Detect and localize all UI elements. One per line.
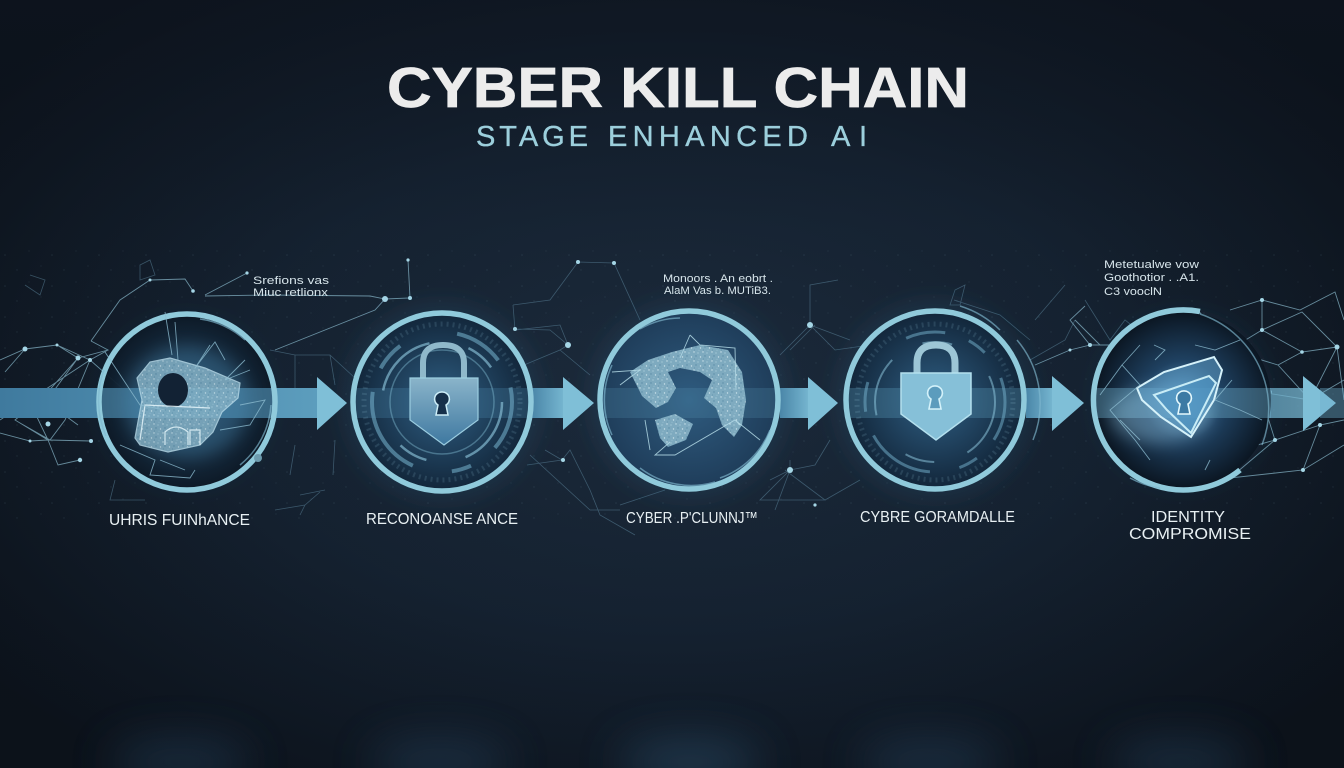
subtitle: [476, 121, 867, 153]
arrow 1 into reconnaissance: [0, 377, 347, 430]
label: stage 1: UHRIS FUINhANCE: [109, 512, 250, 529]
title: CYBER KILL CHAIN: [387, 56, 969, 120]
stage 1: broken lock: [99, 312, 275, 529]
subtitle: AI: [831, 121, 867, 153]
note: stage 3: [663, 273, 773, 297]
stage 4: padlock shield: [846, 306, 1040, 526]
stage 5: identity compromise: [1093, 310, 1271, 543]
note: stage 1: [253, 275, 330, 299]
note: stage 3: AlaM Vas b. MUTiB3.: [664, 285, 771, 297]
label: stage 5: IDENTITY: [1151, 509, 1225, 526]
label: stage 5: COMPROMISE: [1129, 526, 1251, 543]
note: stage 5: C3 vooclN: [1104, 286, 1162, 298]
note: stage 5: Metetualwe vow: [1104, 259, 1199, 271]
stage 2: padlock shield: [353, 313, 531, 528]
note: stage 5: Goothotior . .A1.: [1104, 272, 1199, 284]
label: stage 5: [1129, 509, 1251, 543]
label: stage 2: RECONOANSE ANCE: [366, 511, 518, 528]
arrow 4: [1026, 376, 1084, 431]
background network mesh: [0, 258, 1344, 535]
note: stage 1: Srefions vas: [253, 275, 330, 287]
label: stage 4: CYBRE GORAMDALLE: [860, 509, 1015, 526]
stage 3: globe: [600, 311, 778, 527]
note: stage 5: [1104, 259, 1199, 298]
subtitle: STAGE: [476, 121, 588, 153]
note: stage 3: Monoors . An eobrt .: [663, 273, 773, 285]
note: stage 1: Miuc retlionx: [253, 287, 329, 299]
arrow 2: [532, 377, 594, 430]
arrow 3: [780, 377, 838, 430]
subtitle: ENHANCED: [608, 121, 808, 153]
label: stage 3: CYBER .P'CLUNNJ™: [626, 510, 758, 527]
arrow 5: [1183, 376, 1344, 431]
halos: [86, 288, 1283, 514]
